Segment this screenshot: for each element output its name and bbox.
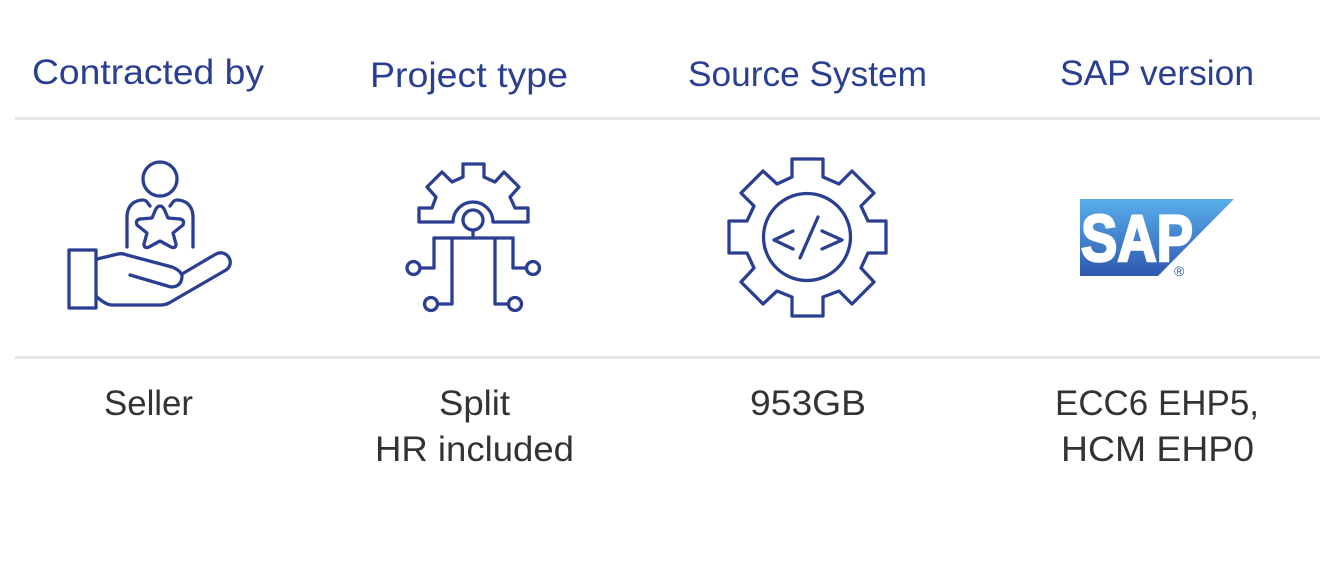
value: ECC6 EHP5, HCM EHP0: ECC6 EHP5, xyxy=(1055,384,1259,423)
icon: SAP logo: SAP xyxy=(1081,201,1193,275)
heading: Project type: Project type xyxy=(370,56,568,95)
value: Split, HR included: HR included xyxy=(375,430,574,469)
value: 953GB: 953GB xyxy=(750,384,866,423)
value: Split, HR included: Split xyxy=(439,384,510,423)
icon: gear with circuit xyxy=(407,164,540,310)
icon: hand holding person with star xyxy=(69,162,230,308)
value: ECC6 EHP5, HCM EHP0: HCM EHP0 xyxy=(1061,430,1254,469)
heading: Contracted by: Contracted by xyxy=(32,53,265,92)
value: Split, HR included xyxy=(375,384,574,469)
value: ECC6 EHP5, HCM EHP0 xyxy=(1055,384,1259,469)
icon: SAP logo: ® xyxy=(1174,263,1185,279)
value: Seller: Seller xyxy=(104,384,193,423)
icon: gear with code brackets xyxy=(729,159,886,316)
heading: Source System: Source System xyxy=(688,55,927,94)
heading: SAP version: SAP version xyxy=(1060,54,1254,93)
